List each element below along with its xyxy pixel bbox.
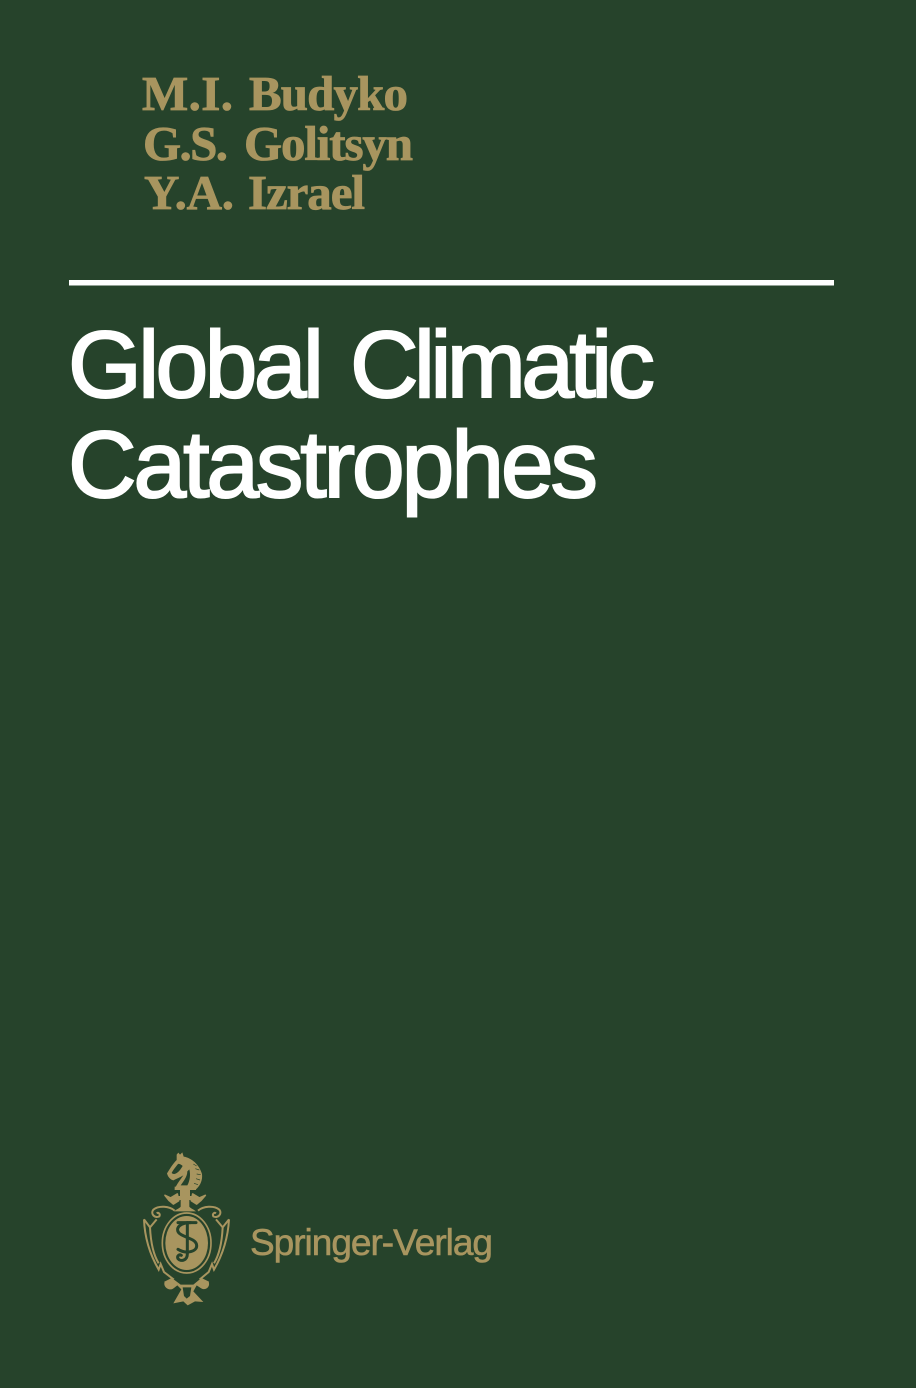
left frame [144,1207,175,1283]
authors [142,66,413,220]
bottom ornament [164,1279,209,1305]
authors: Budyko [249,66,408,121]
pedestal [174,1187,196,1211]
monogram [178,1223,197,1260]
oval medallion ring [162,1213,211,1273]
bottom ornament gap [183,1287,191,1299]
icon: Springer knight crest [144,1152,229,1305]
authors: G.S. [143,116,228,171]
authors: Izrael [248,165,365,220]
authors: M.I. [142,66,233,121]
oval medallion [165,1216,208,1270]
authors: Golitsyn [244,116,413,171]
left and right ribbons [165,1194,205,1204]
title: Global [68,312,324,418]
title [68,312,655,518]
publisher name: Springer-Verlag [250,1222,493,1263]
title: Climatic [350,312,655,418]
title: Catastrophes [68,412,598,518]
horizontal rule [69,280,834,286]
authors: Y.A. [144,165,234,220]
right frame [198,1207,229,1283]
knight head [167,1152,202,1189]
